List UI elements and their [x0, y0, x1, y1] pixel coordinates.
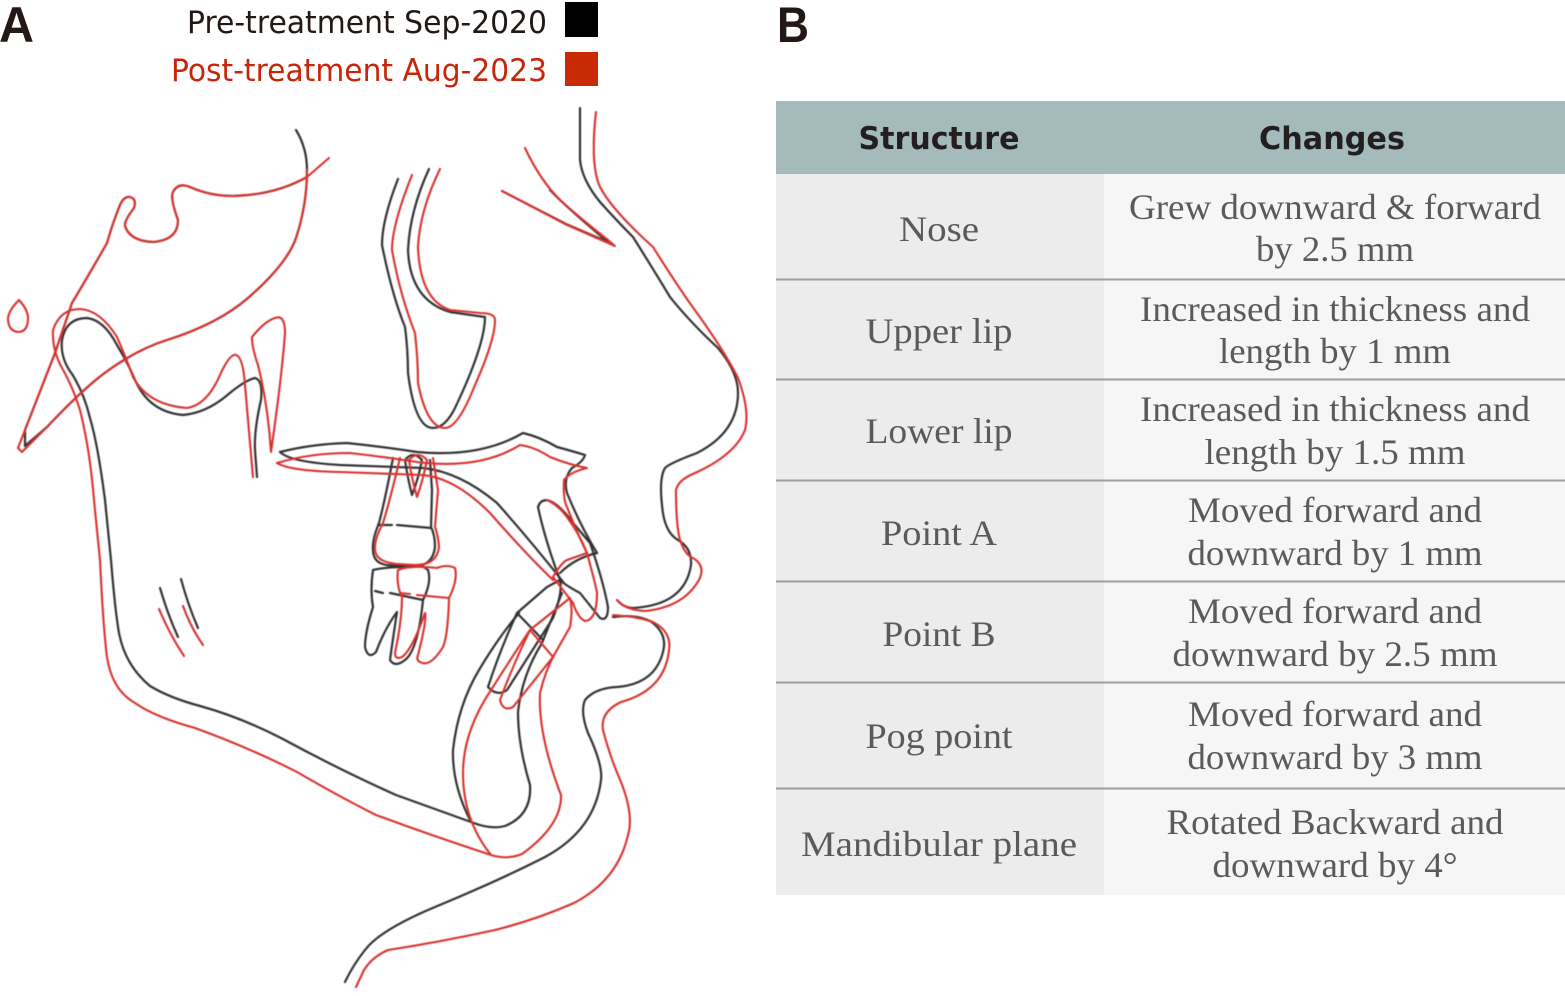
table header [776, 101, 1565, 174]
row: Upper lip: Increased in thickness and [1140, 289, 1530, 329]
row: Point A: Moved forward and [1188, 490, 1482, 530]
row: Mandibular plane [801, 802, 1504, 885]
row: Mandibular plane: downward by 4° [1212, 845, 1458, 885]
row: Lower lip [866, 389, 1530, 472]
row: Upper lip: length by 1 mm [1219, 331, 1451, 371]
post-treatment tracing (red) [8, 112, 746, 987]
legend: pre-treatment swatch [565, 2, 598, 37]
row: Mandibular plane: Rotated Backward and [1166, 802, 1504, 842]
row: Point A [881, 490, 1482, 573]
row: Pog point: Moved forward and [1188, 694, 1482, 734]
row: Lower lip: length by 1.5 mm [1204, 432, 1466, 472]
row: Point B: downward by 2.5 mm [1172, 634, 1498, 674]
legend: pre-treatment label: Pre-treatment Sep-2020 [187, 5, 547, 41]
legend: post-treatment label: Post-treatment Aug-2023 [171, 53, 547, 89]
pre-treatment tracing (black) [25, 108, 738, 982]
row: Pog point [866, 694, 1482, 777]
header: Changes: Changes [1259, 121, 1405, 157]
row: Point A: downward by 1 mm [1188, 533, 1482, 573]
row: Nose [899, 187, 1541, 269]
row: Nose: by 2.5 mm [1256, 229, 1414, 269]
row: Lower lip: Increased in thickness and [1140, 389, 1530, 429]
row: Point A: Point A [881, 513, 997, 553]
cephalometric tracing [8, 108, 746, 987]
legend [171, 2, 598, 89]
row: Nose: Grew downward & forward [1129, 187, 1541, 227]
header: Structure: Structure [858, 121, 1020, 157]
row: Point B: Moved forward and [1188, 591, 1482, 631]
row: Pog point: downward by 3 mm [1188, 737, 1482, 777]
row: Point B [882, 591, 1498, 674]
row: Upper lip: Upper lip [866, 311, 1012, 351]
row: Pog point: Pog point [866, 716, 1012, 756]
row: Mandibular plane: Mandibular plane [801, 824, 1077, 864]
legend: post-treatment swatch [565, 52, 598, 86]
row: Lower lip: Lower lip [866, 411, 1012, 451]
table body backgrounds [776, 174, 1565, 895]
row: Point B: Point B [882, 614, 996, 654]
row: Nose: Nose [899, 209, 979, 249]
row: Upper lip [866, 289, 1530, 371]
table [776, 101, 1565, 895]
